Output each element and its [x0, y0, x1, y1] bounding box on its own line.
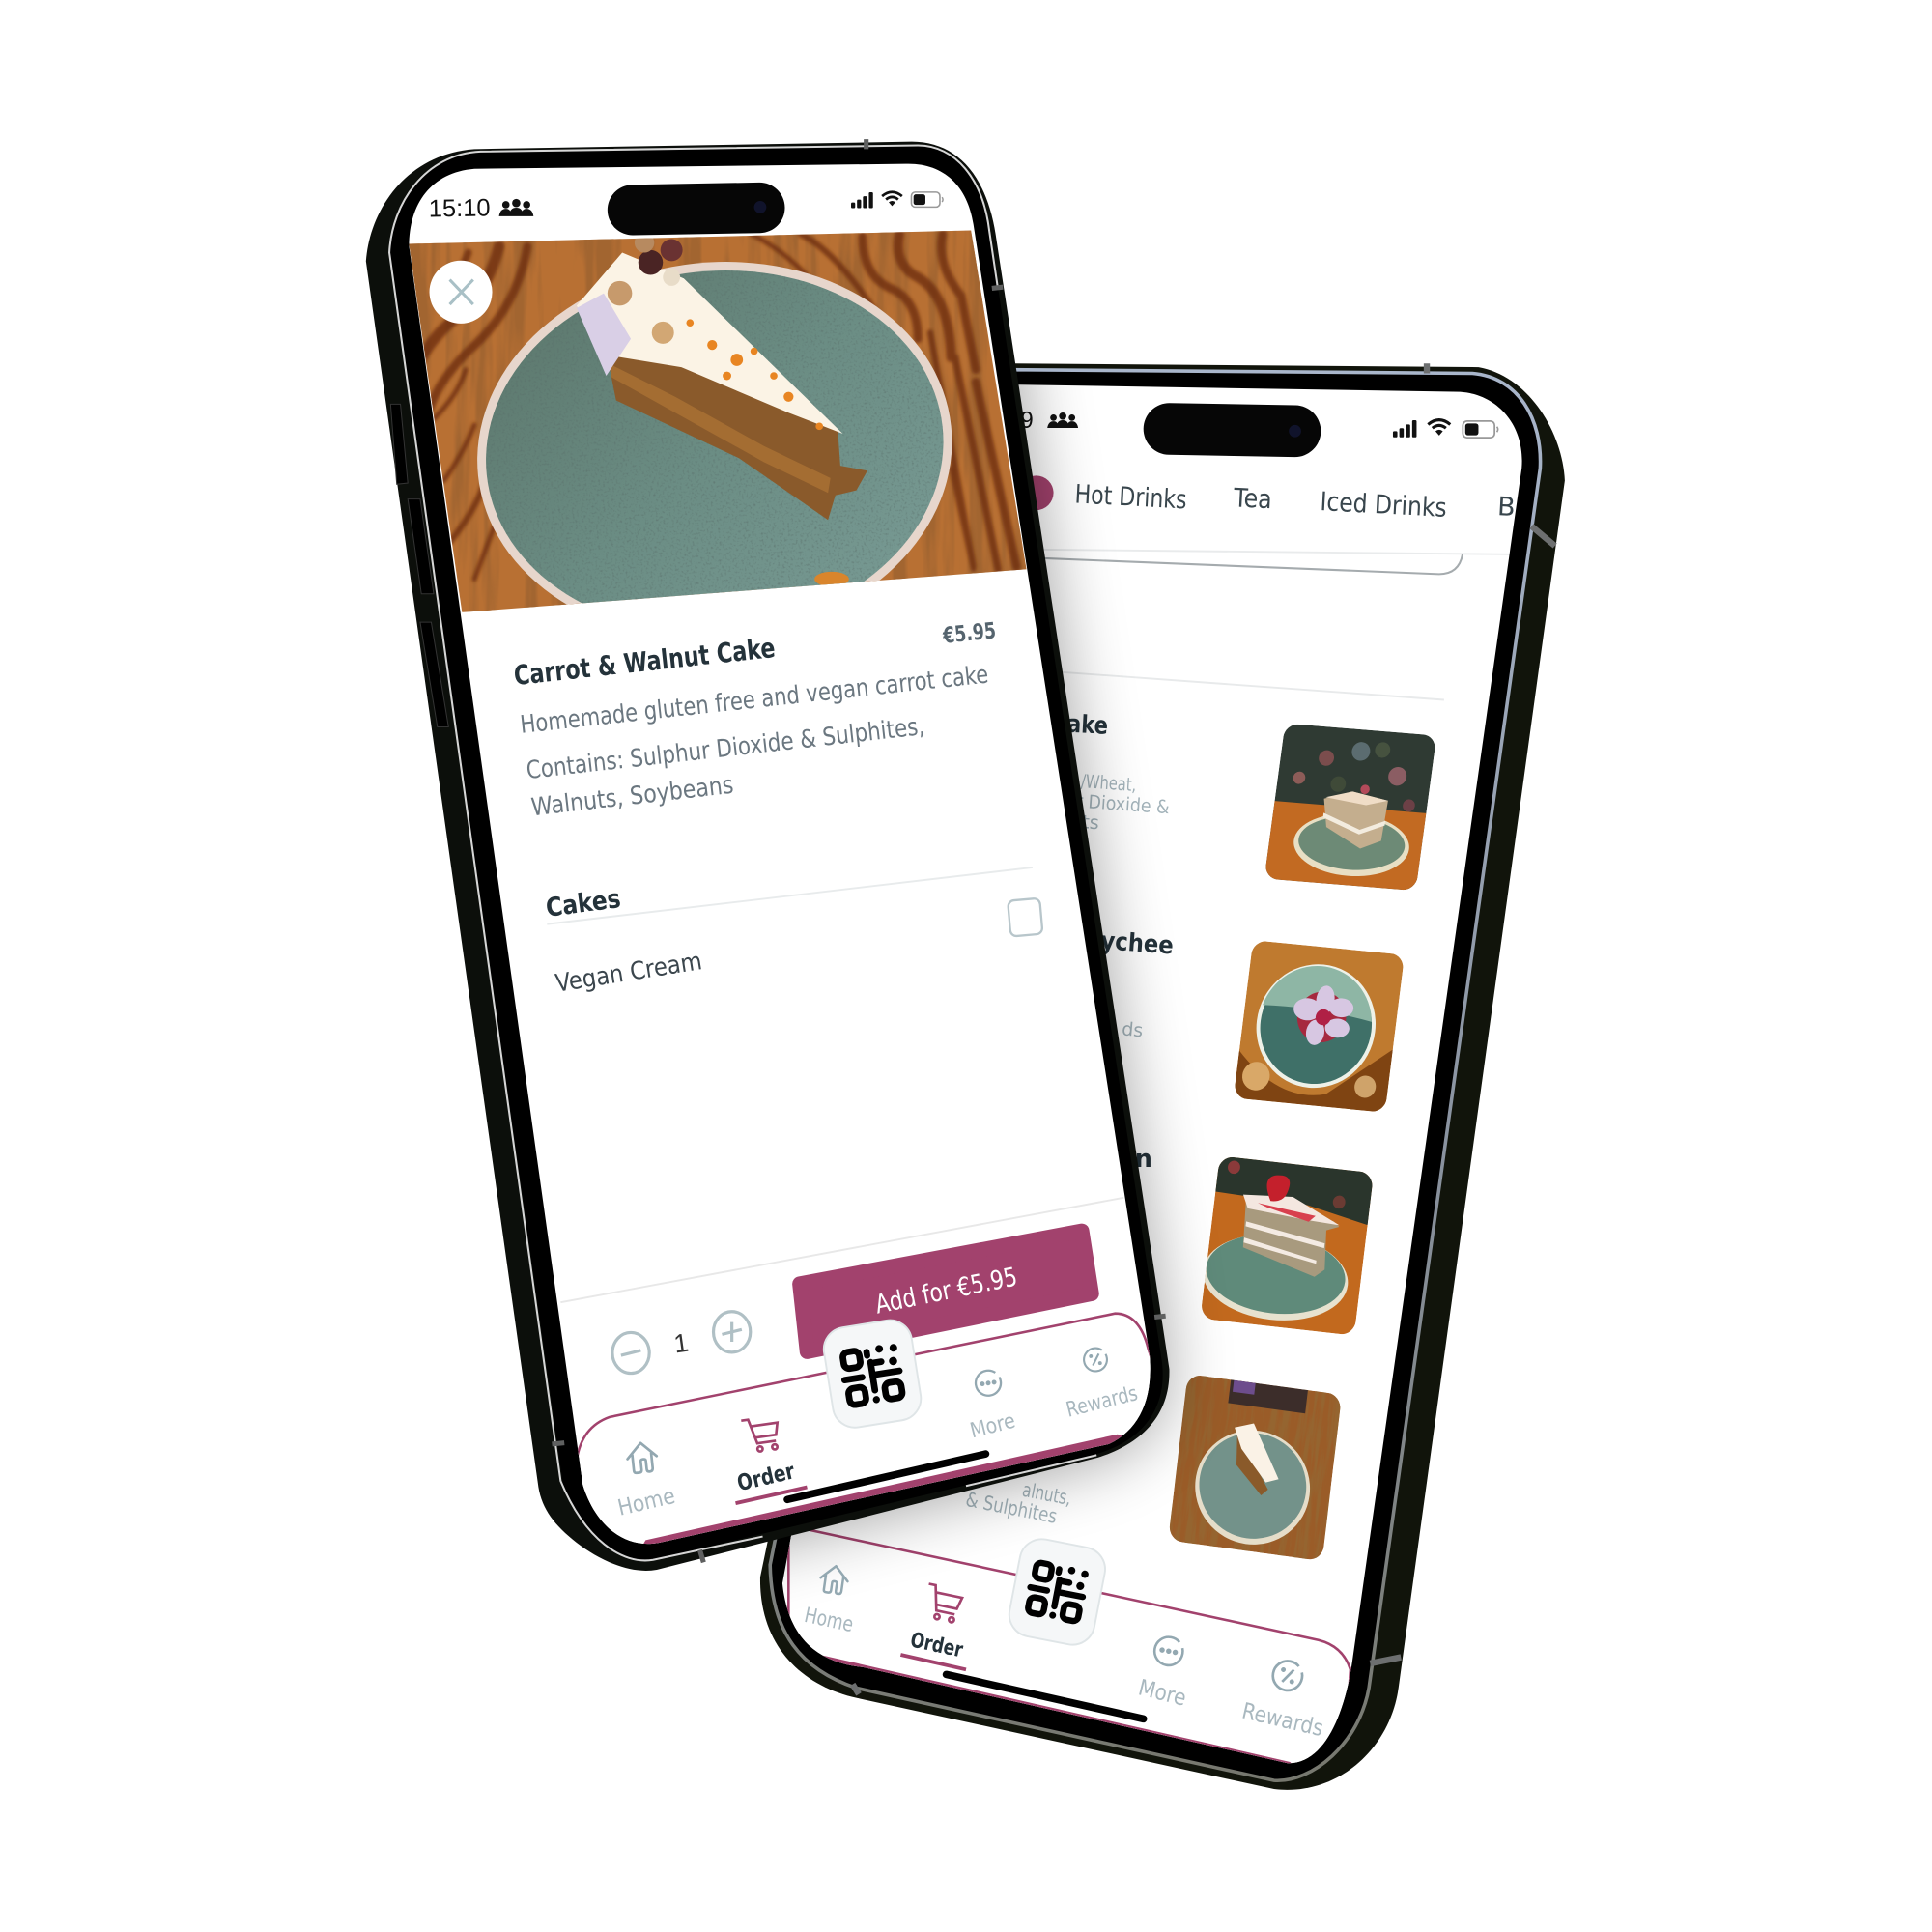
icon: cart [922, 1584, 964, 1624]
price: €5.95 [941, 618, 997, 649]
menu item text: /Wheat, [1080, 770, 1137, 796]
home indicator [947, 1674, 1144, 1719]
icon: more [974, 1369, 1003, 1397]
category tabs: B [1496, 492, 1516, 523]
status bar time: 9 [1020, 408, 1034, 434]
menu item text: & Sulphites [964, 1488, 1059, 1528]
thumbnail: carrot cake on wood [1168, 1374, 1342, 1561]
back phone body [760, 363, 1565, 1790]
status icons [851, 192, 943, 209]
quantity stepper [612, 1312, 751, 1374]
item title: Carrot & Walnut Cake [512, 632, 777, 692]
menu item text: ts [1082, 810, 1100, 834]
label: Order: Order [908, 1628, 965, 1662]
item description: Walnuts, Soybeans [529, 771, 735, 822]
back screen content [788, 403, 1521, 1780]
label: More: More [1136, 1675, 1188, 1712]
hero photo: carrot cake on plate [410, 230, 1026, 612]
menu item text: ake [1066, 710, 1109, 741]
QR tile [821, 1317, 924, 1431]
back phone screen [782, 384, 1522, 1763]
crumb [814, 572, 849, 586]
cake frosting [577, 252, 842, 434]
plus [714, 1312, 751, 1352]
item description [519, 660, 990, 822]
front phone body [366, 142, 1169, 1571]
wood grain streaks [412, 234, 1016, 579]
plate [477, 262, 952, 605]
menu item text: alnuts, [1020, 1478, 1073, 1510]
side buttons [390, 404, 448, 727]
front screen content [394, 182, 1182, 1589]
front phone bezel [389, 146, 1163, 1560]
tab bar [788, 1525, 1350, 1775]
section divider [1054, 671, 1444, 699]
label: Home: Home [802, 1604, 855, 1637]
category tabs: Hot Drinks [1074, 479, 1187, 515]
category tabs [1076, 484, 1513, 517]
header divider [1041, 550, 1521, 554]
home indicator [787, 1454, 985, 1499]
bezel highlight [389, 146, 1096, 1560]
icon: more [1152, 1634, 1185, 1667]
cake sponge [607, 352, 867, 520]
item description: Homemade gluten free and vegan carrot cake [519, 660, 990, 740]
footer divider [560, 1198, 1123, 1302]
order underline [735, 1488, 807, 1503]
icon: group [1047, 412, 1078, 428]
front phone screen [409, 164, 1151, 1544]
category tabs: Tea [1233, 483, 1273, 515]
menu item text: r Dioxide & [1075, 790, 1171, 818]
label: Rewards: Rewards [1239, 1699, 1325, 1742]
icon: rewards [1083, 1347, 1108, 1373]
order underline [900, 1655, 966, 1669]
back phone bezel [770, 370, 1541, 1780]
band marks [552, 139, 1166, 1562]
icon: cart [741, 1416, 781, 1454]
option divider [547, 867, 1033, 924]
dynamic island [607, 182, 785, 236]
option label: Vegan Cream [554, 947, 704, 999]
menu item text: ychee [1100, 926, 1175, 960]
lavender side frosting [577, 294, 631, 376]
search card edge [1041, 554, 1463, 574]
quantity: 1 [672, 1328, 691, 1358]
category pill [1033, 475, 1054, 510]
menu item text [964, 710, 1175, 1528]
dynamic island [1143, 403, 1321, 458]
category tabs: Iced Drinks [1320, 487, 1448, 524]
thumbnail: strawberry layer cake [1197, 1155, 1374, 1336]
back phone: menu screen [366, 142, 1565, 1790]
icon: home [819, 1564, 849, 1595]
close button [430, 261, 493, 324]
label: More: More [968, 1409, 1018, 1443]
antenna bands [853, 363, 1555, 1694]
cake toppings [608, 233, 823, 430]
icon: rewards [1270, 1659, 1304, 1692]
wood table [410, 230, 1026, 612]
icon: group [499, 199, 533, 216]
thumbnail: meringue flower tart [1234, 940, 1405, 1113]
checkbox [1008, 898, 1042, 936]
label: Rewards: Rewards [1064, 1381, 1140, 1423]
label: Order: Order [735, 1459, 798, 1496]
shadow cast by front phone [782, 384, 1206, 1583]
tab bar [567, 1314, 1182, 1577]
menu item text: ds [1121, 1017, 1144, 1041]
time: 15:10 [428, 194, 491, 222]
menu item text: n [1135, 1145, 1152, 1174]
thumbnail: walnut layer cake [1264, 724, 1436, 891]
options heading: Cakes [544, 884, 622, 923]
bottom accent strip [616, 1435, 1182, 1589]
button label: Add for €5.95 [872, 1262, 1020, 1321]
add to order button [800, 1231, 1092, 1351]
front phone: item detail screen [366, 139, 1182, 1589]
minus [612, 1332, 649, 1374]
back tab bar items [802, 1535, 1325, 1742]
status icons [1393, 420, 1498, 438]
label: Home: Home [615, 1484, 677, 1521]
icon: home [626, 1441, 658, 1474]
item description: Contains: Sulphur Dioxide & Sulphites, [525, 712, 926, 785]
bottom accent strip [823, 1656, 1291, 1764]
QR tile [1006, 1535, 1109, 1649]
